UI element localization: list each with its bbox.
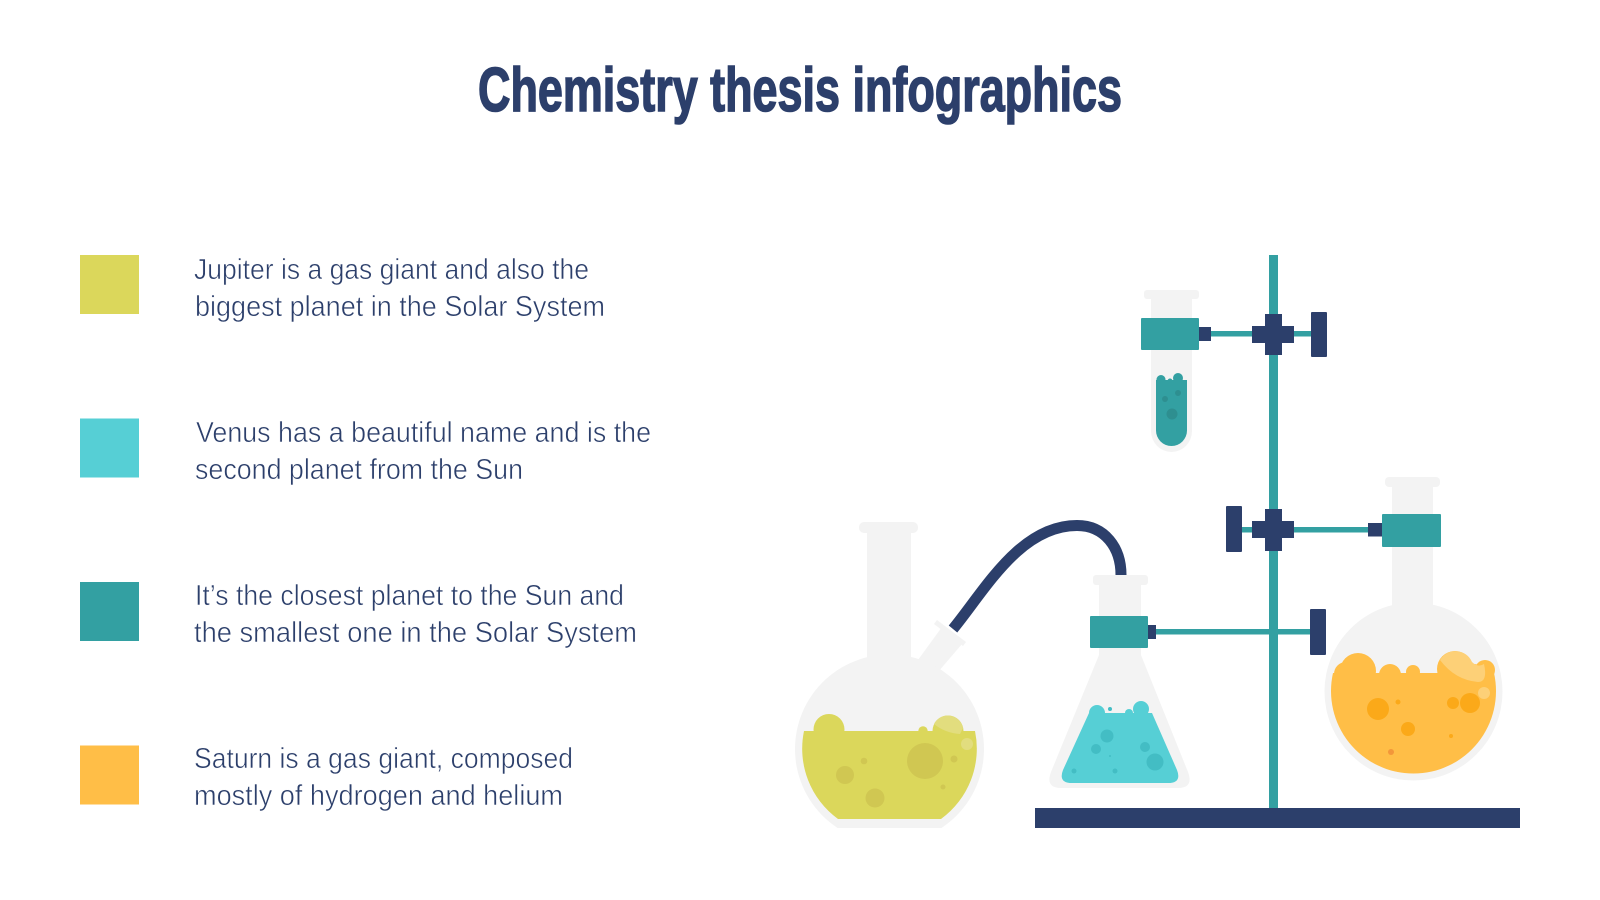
cyan liquid — [1062, 701, 1178, 783]
text: Saturn — [194, 743, 573, 812]
flask glass — [1324, 477, 1502, 780]
legend item: Venus — [80, 417, 651, 486]
stand base — [1035, 808, 1520, 828]
flask glass — [795, 522, 984, 828]
upper clamp — [1141, 312, 1327, 357]
liquid bubbles — [1367, 693, 1480, 738]
title: Chemistry thesis infographics — [478, 56, 1122, 125]
liquid bubbles — [1162, 390, 1181, 420]
flask glass — [1049, 575, 1190, 788]
liquid bubbles — [1072, 707, 1164, 774]
orange liquid — [1331, 651, 1496, 774]
text: Venus: Venus has a beautiful name and is the — [196, 417, 651, 449]
legend item: Saturn — [80, 743, 573, 812]
lower clamp — [1226, 506, 1441, 552]
text: Mercury: the smallest one in the Solar System — [194, 617, 637, 649]
text: Venus: second planet from the Sun — [195, 454, 523, 486]
teal liquid — [1156, 373, 1187, 446]
stand rod — [1269, 255, 1278, 810]
orange round flask — [1226, 477, 1502, 780]
swatch: teal — [80, 582, 139, 641]
text: Saturn: mostly of hydrogen and helium — [194, 780, 563, 812]
text: Jupiter: Jupiter is a gas giant and also the — [194, 254, 589, 286]
upper cross connector — [1252, 314, 1294, 355]
text: Jupiter — [194, 254, 605, 323]
tube glass — [1144, 290, 1199, 452]
yellow liquid — [802, 714, 977, 819]
clamp — [1090, 609, 1326, 655]
swatch: cyan — [80, 418, 139, 478]
legend item: Jupiter — [80, 254, 605, 323]
liquid bubbles — [836, 743, 958, 808]
test tube — [1141, 290, 1327, 452]
conical flask — [1049, 575, 1326, 788]
small bubble — [1388, 749, 1394, 755]
swatch: orange — [80, 746, 139, 804]
yellow round flask — [795, 522, 984, 828]
swatch: yellow — [80, 255, 139, 314]
text: Mercury: It’s the closest planet to the Sun and — [195, 580, 624, 612]
legend item: Mercury — [80, 580, 637, 649]
text: Venus — [195, 417, 651, 486]
connecting tube — [953, 526, 1121, 629]
lower cross connector — [1252, 509, 1294, 551]
liquid highlights — [1440, 651, 1490, 699]
text: Jupiter: biggest planet in the Solar System — [195, 291, 605, 323]
text: Mercury — [194, 580, 637, 649]
text: Saturn: Saturn is a gas giant, composed — [194, 743, 573, 775]
liquid highlights — [934, 716, 973, 750]
illustration: laboratory setup — [795, 255, 1520, 828]
